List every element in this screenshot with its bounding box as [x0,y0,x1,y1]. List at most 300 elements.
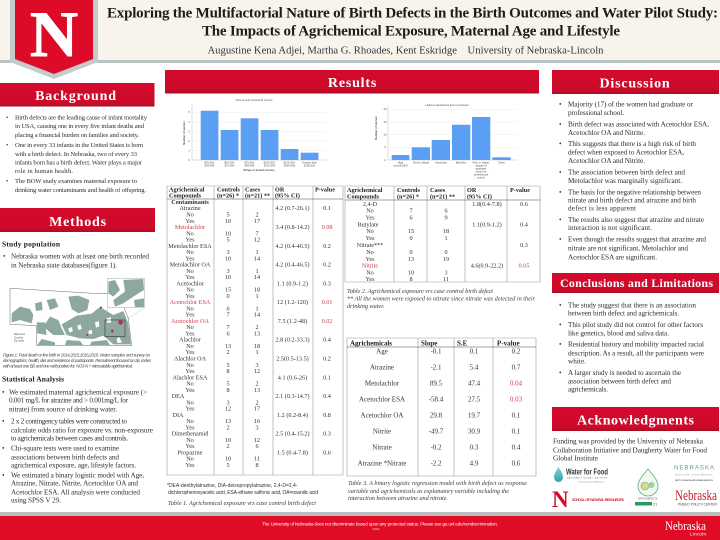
chart: total annual household income: 0 [188,158,190,162]
table 1 rows: Yes [185,293,195,300]
background text: placing a financial burden on families and society. [15,132,139,139]
table 1 rows: 3 [255,362,259,369]
funding text [553,438,707,462]
conclusions heading [552,273,719,293]
logo: water drop with mother and child [635,469,658,506]
table 1 rows: Yes [185,312,195,319]
table 2 header: (n=21) ** [430,194,455,200]
conclusions text [559,301,704,394]
table 1 rows: 1.5 (0.4-7.8) [277,449,308,456]
chart: total annual household income: $99,999 [245,164,255,168]
table 1 rows: 3.4 (0.8-14.2) [275,224,310,231]
study population text: Nebraska women with at least one birth recorded [11,252,149,260]
statistical analysis text: • [2,418,5,426]
table 1 rows: Yes [185,368,195,375]
table 2 rows: 0.3 [520,242,528,249]
table 3 rows: Nitrite [373,428,391,436]
table 3 header: S.E [457,340,468,348]
table 3 rows: 0.1 [512,412,521,420]
table 1 rows: 2 [255,324,259,331]
table 1 rows: 3 [226,249,230,256]
table 3 rows: Atrazine *Nitrate [358,460,406,468]
table 1 rows: Yes [185,218,195,225]
funding text: Global Institute [553,454,598,462]
conclusions text: white. [568,358,586,366]
conclusions text: association between birth defect and [568,377,671,385]
table 1 rows: Metolachlor ESA [168,243,212,250]
table 2 rows: 15 [408,228,414,235]
table 1 rows: 10 [225,255,231,262]
table 1 rows: 13 [225,343,231,350]
table 3 rows: Age [376,348,388,356]
study population text: • [3,252,6,260]
statistical analysis text: associations between birth defects and [11,454,119,462]
panel: discussion [552,70,719,262]
table 2 rows: 1 [444,235,448,242]
conclusions text: • [559,321,562,329]
discussion text: professional school. [568,109,624,117]
chart: highest educational level completed: graduate [476,166,487,170]
discussion text: nitrate and birth defect and atrazine and birth [568,197,696,205]
table 1 rows: 12 [254,437,260,444]
table 1 rows: 4.1 (0.6-26) [278,374,307,381]
table 3 rows: 30.9 [468,428,481,436]
table 1 rows: 4.2 (0.7-26.1) [275,205,310,212]
table 2 rows: 18 [443,228,449,235]
table 1 rows: Acetochlor ESA [170,299,211,306]
discussion text: Birth defect was associated with Acetochlor ESA, [568,121,709,129]
panel: results [165,70,540,507]
table 1 rows: 7 [255,230,259,237]
table 3 rows: -2.1 [430,364,442,372]
footer non-discrimination notice: The University of Nebraska does not discriminate based upon any protected status. Please see go.unl.edu/nondiscrimination. [262,522,498,526]
table 1 rows: Yes [185,349,195,356]
table 2 rows: 2,4-D [363,201,378,208]
background text [6,114,148,194]
table 1 rows: 7 [226,312,230,319]
chart: highest educational level completed: school or [476,170,487,174]
table 2 rows: 0 [409,249,413,256]
table 1 rows: 18 [254,287,260,294]
table 2 header [347,187,530,200]
chart: highest educational level completed: school [477,176,485,180]
panel: acknowledgments [552,407,719,512]
logo: Nebraska Good Life Great Mission: Good Life. Great Mission. [675,472,713,476]
table 2 header: Compounds [347,194,380,200]
statistical analysis text: calculate odds ratio for exposure vs. non-exposure [11,426,153,434]
footer Nebraska wordmark: Nebraska [665,518,706,533]
table 1 rows: Yes [185,424,195,431]
chart: highest educational level completed: 0 [384,158,386,162]
table 2 header: Cases [430,187,446,194]
background text: role in human health. [15,168,73,175]
table 1 rows: Yes [185,237,195,244]
table 3 rows: 0.04 [510,380,523,388]
table 3 caption: Table 3. A binary logistic regression model with birth defect as response [348,480,527,487]
table 2 rows: 10 [408,270,414,276]
conclusions text: • [559,301,562,309]
chart: highest educational level completed: Other [498,160,505,164]
table 1 rows: 2 [255,212,259,218]
chart: highest educational level completed: degree of [475,164,487,168]
conclusions text: The study suggest that there is an association [568,301,696,309]
table 3 header: P-value [497,340,520,348]
table 2 rows: 0 [409,235,413,242]
table 2 rows: 6 [444,208,448,214]
figure 1 caption: Figure 1. Fetal death or live birth in 2014,2015,2016,2019. Water samples and survey on [3,352,151,358]
footer non-discrimination notice [262,522,498,531]
statistical analysis text: 0.001 mg/L for atrazine and > 0.001mg/L for [9,396,129,404]
table 1 rows: Acetochlor OA [171,318,210,325]
figure 1: map of Nebraska: Counties [14,336,24,339]
table 1 rows: 0.4 [323,337,331,344]
table 3 rows: Atrazine [370,364,394,372]
chart: total annual household income [182,98,327,172]
table 1 header: (n=21) ** [245,192,270,200]
table 3 rows: 27.5 [468,396,481,404]
table 2 rows: 13 [408,256,414,263]
table 3 rows: 0.1 [470,348,479,356]
table 1 rows: 3 [226,399,230,406]
table 1 header: Compounds [169,192,202,200]
funding text: Collaboration Initiative and Daugherty Water for Food [553,446,707,454]
table 2 rows: No [366,228,374,235]
table 1 rows: 4.2 (0.4-46.5) [275,262,310,269]
background text: • [6,178,8,185]
chart: total annual household income: $74,999 [225,164,235,168]
table 1 rows: 15 [225,287,231,294]
table 2 header: (n=26) * [397,194,419,200]
conclusions text: • [559,369,562,377]
table 1 rows: 1 [255,305,259,312]
background text: in USA, causing one in every five infant deaths and [15,123,145,130]
table 1 rows: 1 [255,349,259,356]
table 1 caption: Table 1. Agrichemical exposure vrs case control birth defect [168,500,316,507]
logo: Water for Food: at the University of Nebraska [578,480,605,484]
statistical analysis text [2,388,153,504]
table 2 rows: 0.05 [519,262,529,270]
conclusions text: like genetics, blood and saliva data. [568,329,669,337]
table 3 rows [358,348,523,468]
table 1 rows: 0.2 [323,262,331,269]
table 2 rows: 8 [409,276,413,283]
table 2 rows: 4.6(0.9-22.2) [471,262,503,270]
chart: total annual household income: $75,000- [244,160,255,164]
table 2 rows: 11 [443,276,449,283]
table 3 header [350,340,520,348]
table 1 rows: 12 [254,237,260,244]
table 1 rows: 4.2 (0.4-46.5) [275,243,310,250]
table 1 rows: 0.2 [323,356,331,362]
acknowledgments heading: Acknowledgments [577,414,695,428]
panel: background [0,83,154,194]
background text: • [6,114,8,122]
table 1 rows: Yes [185,255,195,262]
table 2 header: Controls [397,187,421,194]
discussion text: • [559,101,562,109]
table 3 caption: variable and agrichemicals as explanatory variable including the [348,488,509,495]
chart: total annual household income: $149,999 [284,164,296,168]
table 2 header: Agrichemical [347,187,383,194]
table 1 rows: Yes [185,443,195,450]
results heading [165,70,539,94]
table 1 rows: 13 [254,387,260,394]
table 1 rows: 13 [225,418,231,425]
table 1 rows: 0.02 [322,318,332,325]
table 3 header: Slope [421,340,437,348]
table 1 rows: 6 [226,330,230,338]
chart: total annual household income: $49,999 [205,164,215,168]
table 1 rows: 3 [255,424,259,431]
table 1 rows: 7 [226,324,230,331]
chart: highest educational level completed: Bachelor [456,160,466,164]
discussion text: • [559,188,562,196]
table 1 rows: No [186,343,194,350]
table 1 rows: Metolachlor OA [170,262,211,269]
study population text: in Nebraska state databases(figure 1). [11,262,117,270]
discussion text: • [559,216,562,224]
statistical analysis text: Acetochlor ESA. All analysis were conducted [11,488,140,496]
table 3 caption: interaction between atrazine and nitrate. [348,495,448,502]
chart: total annual household income: 1 [188,148,190,152]
logo: School of Natural Resources: SCHOOL OF NATURAL RESOURCES [572,498,625,502]
footer Nebraska wordmark: Lincoln [690,532,706,536]
chart: total annual household income: Number of women [182,121,186,145]
chart: highest educational level completed: Post or higher [473,160,489,164]
title [107,6,718,40]
table 1 rows: 12 (1.2-120) [277,299,308,306]
table 1 header [169,186,335,200]
logo: School of Natural Resources [552,487,625,512]
table 1 footnote [167,483,318,496]
background text: drinking water contaminants and health of offspring. [15,187,146,194]
table 2 rows: No [366,208,374,214]
table 1 rows: 5 [226,380,230,388]
table 1 footnote: *DEA-deethylatrazine, DIA-deisopropylatrazine, 2,4-D=2,4- [167,483,298,489]
discussion text: The basis for the negative relationship between [568,188,701,196]
table 2 rows: Yes [365,214,375,222]
chart: total annual household income: $124,999 [264,164,276,168]
table 1 rows: 10 [225,437,231,444]
table 2 rows: 19 [443,256,449,263]
panel: conclusions and limitations [552,273,719,394]
table 1 rows: 13 [254,330,260,338]
table 1 rows: Alachlor OA [174,356,207,362]
discussion text: nitrate are not significant, Metolachlor and [568,244,688,252]
figure 1 caption: demographics, health, diet and residence of participants. Recruitment focused on zip codes [3,358,152,363]
chart: total annual household income: Range of annual income [243,168,275,172]
discussion text: Majority (17) of the women had graduate or [568,101,694,109]
table 1 rows: Atrazine [179,205,201,212]
table 2 caption: drinking water. [347,303,384,310]
logo: Nebraska N shield: N [30,0,78,71]
table 2 header: (95% CI) [467,194,492,200]
chart: total annual household income: 5 [188,110,190,114]
chart: total annual household income: Greater than [302,160,318,164]
discussion text: This suggests that there is a high risk of birth [568,140,696,148]
discussion text: Acetochlor OA and Nitrite. [568,129,645,137]
table 1 rows: No [186,268,194,275]
table 1 rows: Alachlor ESA [173,374,208,381]
chart: highest educational level completed: Number of women [374,116,378,140]
table 1 rows: 1 [255,293,259,300]
table 2 rows: 0.4 [520,222,528,228]
table 1 rows: No [186,380,194,388]
footer non-discrimination notice: ©2024 [372,528,380,531]
statistical analysis text: • [2,472,5,480]
table 3 rows: -49.7 [429,428,444,436]
table 1 rows: 2 [226,424,230,431]
table 3 rows: Metolachlor [365,380,400,388]
background text: with a birth defect. In Nebraska, two of every 33 [15,151,138,158]
table 1 rows: 16 [254,418,260,425]
figure 1: map of Nebraska [10,278,144,346]
acknowledgments heading [552,407,719,431]
statistical analysis heading: Statistical Analysis [2,374,64,384]
table 1 rows: No [186,437,194,444]
table 2 rows: 6 [409,214,413,222]
table 3 rows: 0.4 [512,444,521,452]
discussion text: • [559,121,562,129]
table 1 rows: 8 [226,387,230,394]
table 2 rows: No [366,270,374,276]
table 1 rows: Yes [185,387,195,394]
table 2 caption [347,288,536,310]
chart: highest educational level completed: professional [474,172,489,176]
chart: total annual household income: 2 [188,139,190,143]
table 1 header: Cases [245,186,261,194]
table 1 rows: Alachlor [179,337,201,344]
discussion heading: Discussion [599,76,671,92]
table 1 rows: No [186,249,194,256]
table 3 rows: 29.8 [430,412,443,420]
table 1 rows: 1.1 (0.9-1.2) [277,280,308,287]
table 1 rows: DEA [172,393,185,400]
results heading: Results [328,76,377,91]
logo: Nebraska Good Life Great Mission [674,466,714,482]
discussion text: interaction is not significant. [568,224,652,232]
table 1 rows: 2.8 (0.2-33.3) [275,337,310,344]
table 1 rows: DIA [172,412,184,419]
logo: School of Natural Resources: N [552,487,569,512]
statistical analysis text: Atrazine, Nitrate, Nitrite, Acetochlor OA and [11,480,138,488]
chart: highest educational level completed: school/GED [393,164,408,168]
table 1 rows: No [186,324,194,331]
table 2 rows [357,201,529,283]
table 1 rows: No [186,362,194,369]
chart: highest educational level completed: Some college [413,160,430,164]
chart: highest educational level completed: 5 [384,145,386,149]
table 2 rows: 0.6 [520,201,528,208]
table 1 rows: 2 [226,349,230,356]
table 2 rows: No [366,249,374,256]
table 3: binary logistic regression [347,338,536,476]
chart: total annual household income: Total annual household income [235,98,273,102]
table 1 rows: 8 [255,462,259,469]
table 3 rows: -2.2 [430,460,442,468]
title: The Impacts of Agrichemical Exposure, Maternal Age and Lifestyle [202,24,620,40]
table 1 rows: 0.01 [322,299,332,306]
table 1 rows: 10 [225,218,231,225]
table 1 rows: Yes [185,462,195,469]
table 1 rows: No [186,399,194,406]
logo: Water for Food: Water for Food [566,468,608,476]
discussion heading [552,70,719,94]
table 2 rows: Yes [365,235,375,242]
conclusions text: agrichemicals. [568,386,608,394]
figure 1: map of Nebraska: Zip codes [14,341,25,343]
logo: Water for Food [554,467,608,484]
statistical analysis text: • [2,388,5,396]
chart: total annual household income: $125,000- [283,160,296,164]
table 1 rows: 2.5(0.5-13.5) [276,356,309,362]
conclusions text: This pilot study did not control for other factors [568,321,703,329]
table 1 rows: 2.1 (0.3-14.7) [275,393,310,400]
logo: water drop with mother and child: BIRTH DEFECTS [639,498,658,500]
discussion text: Metolachlor was marginally significant. [568,177,682,185]
statistical analysis text: We estimated a binary logistic model with Age, [11,472,144,480]
table 1 header: (95% CI) [275,192,300,200]
discussion text: defect is less apparent [568,205,636,213]
table 1 rows: No [186,305,194,312]
methods heading: Methods [49,215,107,230]
table 1 footnote: dichlorophenoxyacetic acid, ESA-ethane sulfonic acid, OA=oxanilic acid [168,490,318,496]
table 1 rows: Dimethenamid [172,431,209,438]
discussion text: Acetochlor ESA are significant. [568,254,657,262]
conclusions text: description. As a result, all the participants were [568,349,704,357]
table 1 rows: Metolachlor [175,224,205,231]
table 1 rows: 0.3 [323,280,331,287]
conclusions text: Residential history and mobility impacted racial [568,341,704,349]
table 3 rows: 5.4 [470,364,479,372]
table 2 header: OR [467,187,477,194]
table 1 rows: 1 [255,268,259,275]
chart: total annual household income: $25,000- [204,160,215,164]
table 1 rows: 5 [226,212,230,218]
table 1 rows: Contaminants [171,199,209,206]
background text: The BOW study examines maternal exposure to [15,178,138,185]
table 1 rows: 2 [255,380,259,388]
table 1 rows: 5 [226,462,230,469]
title: Exploring the Multifactorial Nature of Birth Defects in the Birth Outcomes and Water Pilot Study: [107,6,718,22]
logo: water drop with mother and child: 21 [653,502,658,506]
table 1 rows: 17 [254,406,260,413]
table 1 rows: 10 [225,274,231,281]
chart: highest educational level completed: 10 [384,132,387,136]
discussion text: • [559,236,562,244]
background heading: Background [35,89,117,104]
table 1 rows: 2.5 (0.4-15.2) [275,431,310,438]
background text: • [6,142,8,149]
table 1 rows: 0.08 [322,224,332,231]
table 1 rows: 17 [254,218,260,225]
table 1 rows: 0.1 [323,205,331,212]
chart: highest educational level completed: High [398,160,404,164]
background heading [0,83,154,106]
table 1 header: Agrichemical [169,186,205,194]
chart: total annual household income: $150,000 [304,164,316,168]
table 1 rows: 2 [226,443,230,450]
table 1 rows: 14 [254,274,260,281]
table 1 rows: 0.3 [323,431,331,438]
table 1 rows: Yes [185,274,195,281]
statistical analysis text: We estimated maternal agrichemical exposure (> [9,388,147,396]
discussion text: The association between birth defect and [568,169,685,177]
table 1 rows: 0 [226,293,230,300]
study population text [3,252,149,270]
table 1 rows: 6 [226,305,230,312]
statistical analysis text: 2 x 2 contingency tables were constructed to [11,418,127,426]
